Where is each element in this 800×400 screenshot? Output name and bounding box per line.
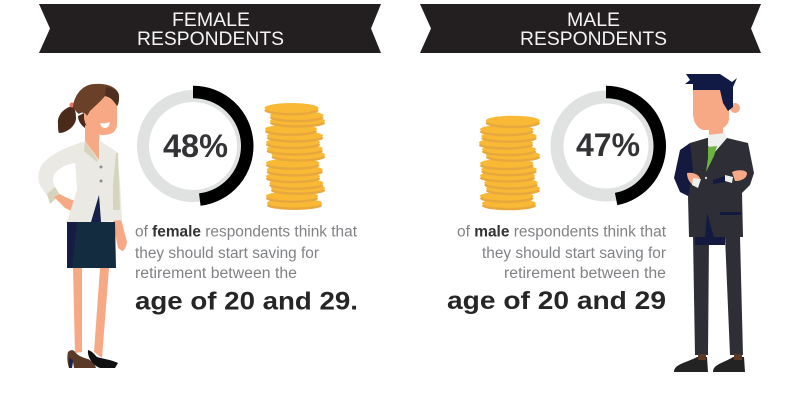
arm shadow bbox=[713, 176, 725, 184]
coin stack: male bbox=[479, 116, 540, 210]
legs bbox=[73, 268, 82, 353]
heading: female respondents: RESPONDENTS bbox=[137, 29, 284, 50]
highlight: age range female: age of 20 and 29. bbox=[135, 288, 358, 316]
text block: male description: they should start saving for bbox=[482, 245, 666, 262]
sleeve shade bbox=[113, 153, 120, 210]
ponytail bbox=[58, 106, 76, 133]
neck bbox=[709, 124, 723, 140]
hair bbox=[73, 84, 119, 116]
heading: female respondents: FEMALE bbox=[172, 10, 250, 31]
forearm over bbox=[688, 176, 712, 198]
hands and cuffs bbox=[687, 173, 700, 187]
value: 47%: 47% bbox=[576, 127, 640, 163]
highlight: age range male: age of 20 and 29 bbox=[447, 287, 666, 315]
text block: male description bbox=[447, 224, 667, 315]
banner: male respondents bbox=[420, 4, 761, 53]
shoes bbox=[674, 357, 708, 372]
collar bbox=[708, 133, 727, 152]
banner: female respondents bbox=[39, 4, 381, 53]
neck bbox=[85, 125, 100, 160]
face bbox=[693, 88, 729, 130]
figure: man bbox=[674, 74, 754, 372]
waist bbox=[695, 236, 725, 245]
hair behind neck bbox=[78, 112, 92, 128]
text block: female description: retirement between the bbox=[135, 265, 297, 282]
text block: male description: of male respondents think that bbox=[457, 224, 666, 240]
jacket bbox=[67, 141, 122, 222]
collar bbox=[84, 141, 98, 162]
hand on hip bbox=[54, 194, 85, 212]
heading: male respondents: RESPONDENTS bbox=[520, 29, 667, 50]
text block: female description bbox=[135, 224, 358, 316]
skirt bbox=[67, 222, 116, 268]
legs bbox=[693, 236, 709, 355]
shoes bbox=[67, 350, 96, 368]
hair bbox=[685, 74, 737, 111]
blouse wedge bbox=[91, 195, 101, 222]
smile bbox=[100, 122, 110, 128]
text block: female description: of female respondents think that bbox=[135, 224, 358, 240]
left sleeve bbox=[674, 143, 712, 197]
value: 48%: 48% bbox=[163, 128, 228, 164]
jacket pocket bbox=[720, 212, 741, 215]
donut chart: 47% bbox=[557, 92, 660, 199]
text block: female description: they should start saving for bbox=[135, 245, 319, 262]
heading: male respondents: MALE bbox=[567, 10, 620, 31]
jacket bbox=[688, 138, 754, 237]
figure: woman bbox=[38, 84, 127, 368]
cuff bbox=[47, 187, 60, 204]
face bbox=[84, 95, 117, 135]
ear bbox=[730, 103, 740, 113]
tie bbox=[706, 146, 717, 172]
right forearm bbox=[113, 219, 127, 251]
coin stack: female bbox=[264, 103, 325, 210]
left sleeve bbox=[38, 141, 86, 197]
donut chart: 48% bbox=[143, 92, 247, 200]
jacket vent bbox=[705, 213, 714, 237]
text block: male description: retirement between the bbox=[504, 265, 666, 282]
